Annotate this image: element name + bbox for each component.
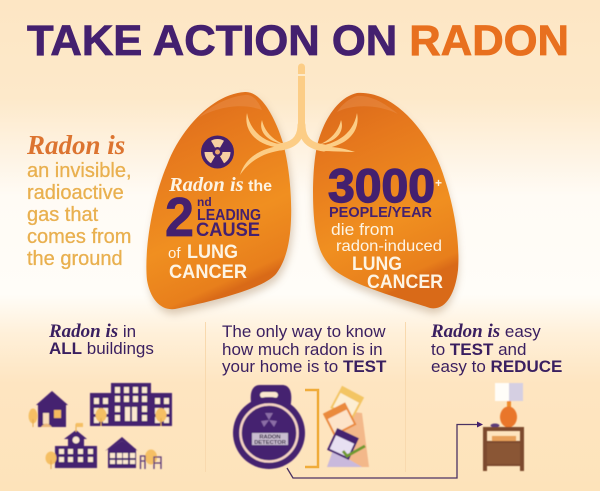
text block: radon definition: gas that (27, 204, 99, 226)
column heading: test: your home is to TEST (222, 357, 387, 376)
right lung text: LUNG (352, 254, 402, 275)
calendar: orange (324, 404, 355, 435)
right lung text: 3000 (328, 159, 435, 212)
icon: school (46, 423, 97, 469)
icon: lamp and nightstand (483, 383, 524, 471)
right lung text (328, 159, 443, 293)
right lung text: die from (331, 220, 394, 239)
lung shadows (148, 97, 458, 314)
left lung text: of (168, 245, 181, 262)
left lung text: LEADING (197, 207, 261, 224)
text block: radon definition: comes from (27, 226, 131, 248)
detector display label: RADON (259, 434, 281, 440)
column heading: all buildings: Radon is in (48, 321, 136, 342)
text block: radon definition: the ground (27, 248, 123, 270)
text block: radon definition (26, 130, 132, 270)
right lung text: + (435, 176, 442, 190)
icon: large building (90, 383, 172, 426)
column heading: easy (430, 321, 562, 376)
left lung text: Radon is the (168, 174, 272, 196)
detector display label (252, 433, 288, 446)
detector display label: DETECTOR (254, 440, 287, 446)
icon: radon detector (233, 385, 305, 469)
column heading: easy: to TEST and (431, 340, 526, 359)
text block: radon definition: Radon is (26, 130, 125, 160)
check mark (343, 446, 365, 456)
icon: radiation symbol (201, 136, 234, 168)
left lung text: 2 (165, 186, 194, 248)
text block: radon definition: radioactive (27, 182, 124, 204)
arrow: detector to nightstand (287, 422, 483, 478)
left lung text: CAUSE (196, 220, 260, 241)
lungs illustration (146, 67, 458, 314)
lung highlights (198, 95, 398, 118)
left lung text: CANCER (169, 262, 247, 283)
column heading: all buildings: ALL buildings (49, 339, 154, 358)
column heading: easy: easy to REDUCE (431, 357, 562, 376)
trachea and bronchi (240, 67, 358, 175)
column heading: test (222, 322, 387, 376)
column heading: easy: Radon is easy (430, 321, 541, 342)
bracket (305, 390, 318, 467)
icon: buildings (28, 383, 172, 469)
right lung text: CANCER (367, 272, 443, 293)
column heading: test: The only way to know (222, 322, 386, 341)
title: TAKE ACTION ON RADON (27, 17, 569, 65)
icon: house (28, 391, 68, 427)
left lung text: LUNG (187, 242, 238, 263)
icon: radiation mark (261, 413, 277, 427)
calendar: purple (328, 429, 358, 459)
calendar: yellow (332, 387, 363, 418)
column heading: test: how much radon is in (222, 340, 383, 359)
icon: calendars (324, 387, 369, 467)
left lung text: nd (197, 195, 212, 209)
left lung (146, 92, 291, 309)
icon: community building with playground (105, 437, 161, 469)
column heading: all buildings (48, 321, 154, 358)
right lung text: radon-induced (336, 238, 442, 255)
right lung text: PEOPLE/YEAR (329, 205, 433, 221)
text block: radon definition: an invisible, (27, 160, 132, 182)
left lung text (165, 174, 272, 283)
right lung (313, 93, 458, 308)
